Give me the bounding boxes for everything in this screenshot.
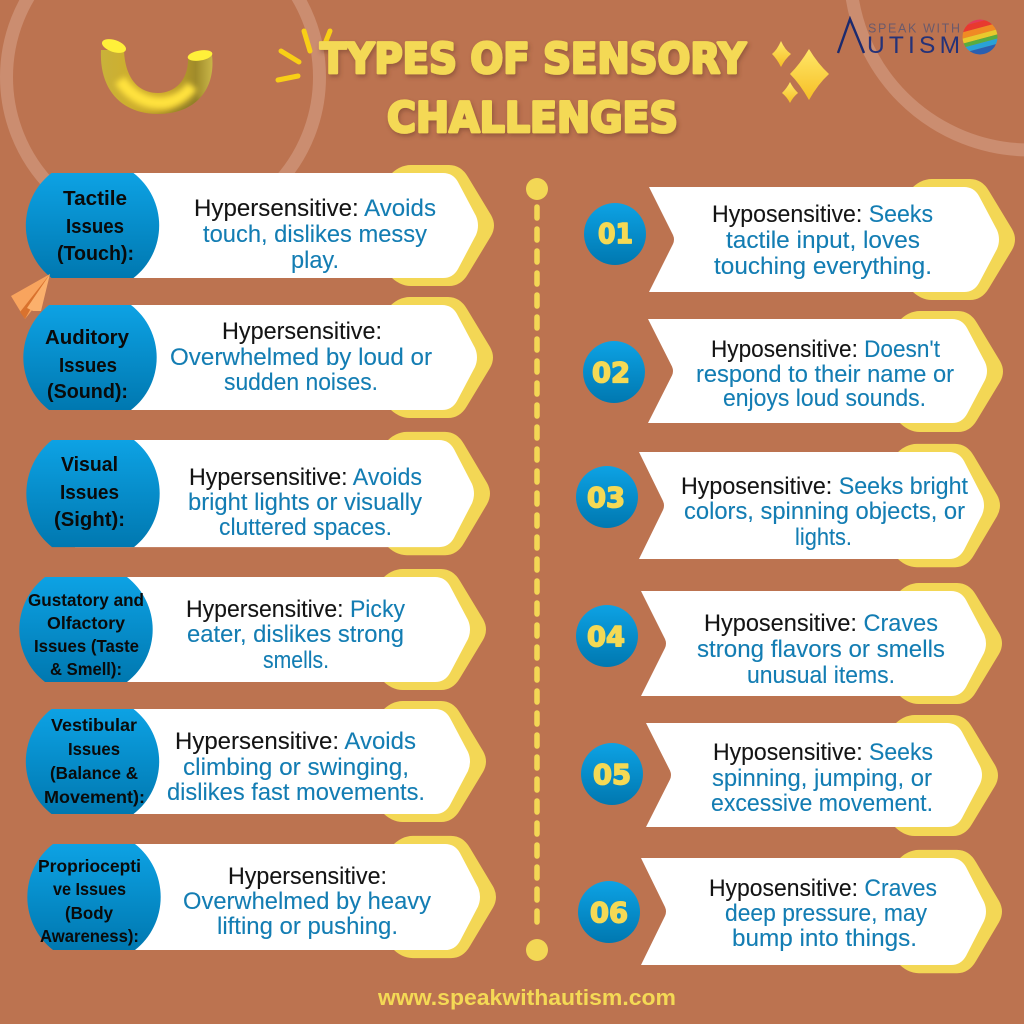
panel: gustatory and olfactory hypersensitive — [19, 569, 486, 690]
footer website url: www.speakwithautism.com — [377, 985, 676, 1010]
panel: proprioceptive hypersensitive — [27, 836, 496, 958]
panel: gustatory and olfactory hypersensitive: Olfactory — [47, 613, 125, 633]
panel: visual hypersensitive: (Sight): — [54, 508, 125, 531]
panel: vestibular hyposensitive 05: 05 — [593, 758, 631, 791]
panel: auditory hypersensitive: sudden noises. — [224, 369, 378, 396]
panel: tactile hypersensitive — [26, 165, 494, 286]
dashed timeline — [526, 178, 548, 961]
panel: vestibular hyposensitive 05 — [581, 715, 998, 836]
panel: auditory hypersensitive — [23, 297, 493, 418]
icon: paper plane — [11, 274, 50, 319]
panel: tactile hyposensitive 01: Hyposensitive: Seeks — [712, 201, 933, 228]
decorative ring: top right — [850, 0, 1024, 150]
panel: tactile hypersensitive: Issues — [66, 215, 124, 238]
icon: golden macaroni — [100, 39, 212, 114]
panel: gustatory hyposensitive 04: strong flavors or smells — [697, 636, 945, 663]
panel: gustatory hyposensitive 04: Hyposensitive: Craves — [704, 610, 938, 637]
panel: tactile hypersensitive: Tactile — [63, 187, 127, 210]
panel: visual hypersensitive: cluttered spaces. — [219, 514, 392, 541]
title — [320, 34, 747, 142]
panel: proprioceptive hypersensitive: Overwhelmed by heavy — [183, 888, 431, 915]
panel: visual hyposensitive 03: colors, spinning objects, or — [684, 498, 965, 525]
panel: proprioceptive hypersensitive: Hypersensitive: — [228, 863, 387, 890]
panel: gustatory and olfactory hypersensitive: Issues (Taste — [34, 636, 139, 656]
panel: visual hyposensitive 03 — [576, 444, 1000, 567]
panel: tactile hyposensitive 01: tactile input, loves — [726, 227, 920, 254]
panel: proprioceptive hypersensitive: Awareness): — [40, 926, 139, 946]
panel: auditory hypersensitive: Overwhelmed by loud or — [170, 344, 432, 371]
panel: visual hyposensitive 03: Hyposensitive: Seeks bright — [681, 473, 968, 500]
panel: vestibular hypersensitive: dislikes fast movements. — [167, 779, 425, 806]
panel: proprioceptive hyposensitive 06 — [578, 850, 1002, 973]
panel: vestibular hypersensitive: Issues — [68, 739, 120, 759]
panel: gustatory and olfactory hypersensitive: Gustatory and — [28, 590, 144, 610]
panel: proprioceptive hyposensitive 06: bump into things. — [732, 925, 917, 952]
panel: proprioceptive hypersensitive: ve Issues — [53, 879, 126, 899]
panel: gustatory and olfactory hypersensitive: & Smell): — [50, 659, 122, 679]
panel: tactile hyposensitive 01: 01 — [598, 217, 633, 250]
icon: rainbow gear — [962, 20, 998, 54]
panel: vestibular hypersensitive — [26, 701, 486, 822]
panel: gustatory hyposensitive 04 — [576, 583, 1002, 704]
panel: gustatory and olfactory hypersensitive: eater, dislikes strong — [187, 621, 404, 648]
panel: visual hypersensitive: bright lights or visually — [188, 489, 422, 516]
panel: proprioceptive hyposensitive 06: Hyposensitive: Craves — [709, 875, 937, 902]
logo: Speak With Autism: SPEAK WITH — [868, 22, 960, 36]
panel: visual hypersensitive: Issues — [60, 481, 119, 504]
panel: tactile hypersensitive: (Touch): — [57, 242, 134, 265]
panel: proprioceptive hyposensitive 06: 06 — [590, 896, 628, 929]
panel: vestibular hyposensitive 05: Hyposensitive: Seeks — [713, 739, 933, 766]
panel: gustatory hyposensitive 04: 04 — [587, 620, 625, 653]
panel: auditory hypersensitive: Hypersensitive: — [222, 318, 382, 345]
panel: auditory hyposensitive 02: enjoys loud sounds. — [723, 385, 926, 412]
logo: Speak With Autism: UTISM — [867, 32, 960, 59]
panel: auditory hyposensitive 02 — [583, 311, 1003, 432]
panel: visual hypersensitive: Visual — [61, 453, 118, 476]
panel: tactile hypersensitive: Hypersensitive: Avoids — [194, 195, 436, 222]
panel: gustatory and olfactory hypersensitive: smells. — [263, 647, 329, 674]
panel: vestibular hyposensitive 05: excessive movement. — [711, 790, 933, 817]
panel: vestibular hypersensitive: Movement): — [44, 787, 145, 807]
panel: vestibular hypersensitive: Hypersensitive: Avoids — [175, 728, 416, 755]
panel: gustatory hyposensitive 04: unusual items. — [747, 662, 895, 689]
panel: tactile hypersensitive: touch, dislikes messy — [203, 221, 427, 248]
icon: yellow burst lines — [278, 31, 330, 80]
panel: proprioceptive hypersensitive: (Body — [65, 903, 113, 923]
panel: vestibular hyposensitive 05: spinning, jumping, or — [712, 765, 932, 792]
panel: vestibular hypersensitive: Vestibular — [51, 715, 137, 735]
panel: auditory hypersensitive: Auditory — [45, 326, 130, 349]
panel: auditory hyposensitive 02: respond to their name or — [696, 361, 954, 388]
panel: auditory hypersensitive: (Sound): — [47, 380, 128, 403]
decorative ring: top left — [6, 0, 320, 234]
panel: auditory hypersensitive: Issues — [59, 354, 117, 377]
panel: vestibular hypersensitive: climbing or swinging, — [183, 754, 409, 781]
panel: gustatory and olfactory hypersensitive: Hypersensitive: Picky — [186, 596, 405, 623]
panel: visual hypersensitive — [26, 432, 490, 555]
title: CHALLENGES — [387, 93, 678, 142]
panel: proprioceptive hyposensitive 06: deep pressure, may — [725, 900, 927, 927]
logo: Speak With Autism — [836, 16, 998, 54]
icon: sparkles — [772, 41, 829, 103]
panel: proprioceptive hypersensitive: Propriocepti — [38, 856, 141, 876]
panel: tactile hyposensitive 01 — [584, 179, 1015, 300]
title: TYPES OF SENSORY — [320, 34, 747, 83]
panel: visual hyposensitive 03: 03 — [587, 481, 625, 514]
panel: visual hyposensitive 03: lights. — [795, 524, 852, 551]
panel: vestibular hypersensitive: (Balance & — [50, 763, 138, 783]
panel: proprioceptive hypersensitive: lifting or pushing. — [217, 913, 398, 940]
panel: tactile hyposensitive 01: touching everything. — [714, 253, 932, 280]
panel: visual hypersensitive: Hypersensitive: Avoids — [189, 464, 422, 491]
panel: auditory hyposensitive 02: Hyposensitive: Doesn't — [711, 336, 940, 363]
panel: auditory hyposensitive 02: 02 — [592, 356, 630, 389]
panel: tactile hypersensitive: play. — [291, 247, 339, 274]
